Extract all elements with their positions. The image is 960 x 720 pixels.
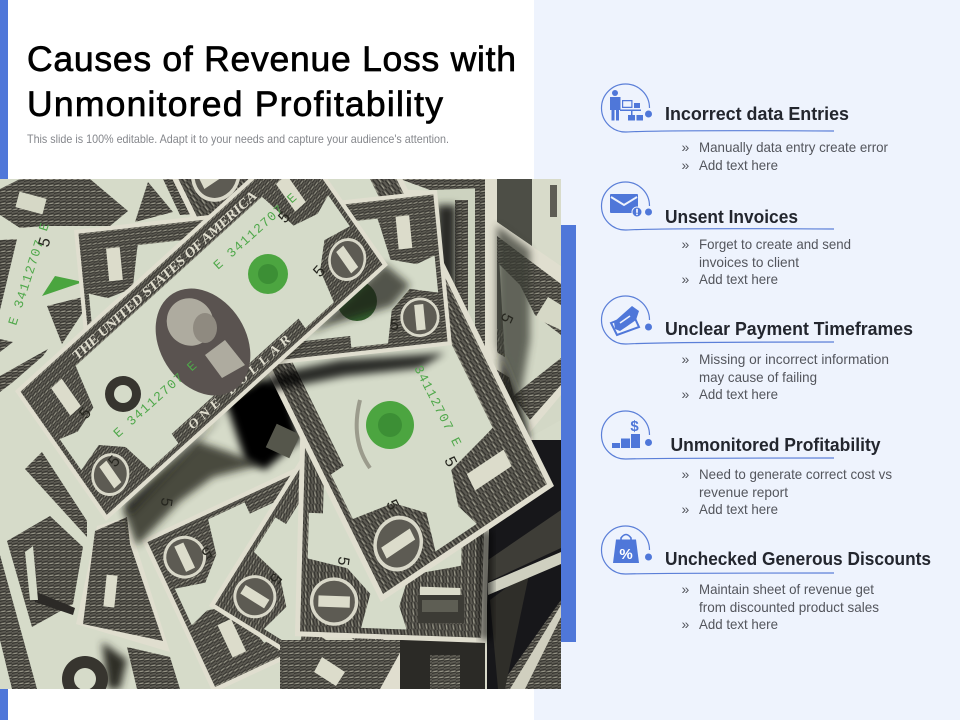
frame line	[602, 182, 834, 230]
bullets: Forget to create and send	[699, 236, 851, 252]
title: Unmonitored Profitability	[27, 84, 443, 124]
icon: bars with dollar sign: $	[630, 418, 639, 435]
item: Incorrect data Entries	[602, 84, 888, 173]
icon: bars with dollar sign	[612, 418, 640, 448]
right pale panel	[534, 0, 960, 720]
serial numbers and denominations: 5	[382, 497, 402, 513]
bullets: Add text here	[699, 157, 778, 173]
serial numbers and denominations: 5	[105, 453, 124, 471]
serial numbers and denominations: 5	[334, 555, 352, 567]
bullets	[682, 351, 889, 402]
icon: envelope with alert	[610, 194, 642, 217]
connector dot	[645, 554, 652, 560]
heading: Unmonitored Profitability	[670, 435, 880, 455]
bullets: »	[682, 351, 690, 367]
bullets: »	[682, 236, 690, 252]
connector dot	[645, 208, 652, 216]
serial numbers and denominations: 5	[310, 263, 329, 281]
bullets: Add text here	[699, 271, 778, 287]
icon: shopping bag with percent	[613, 534, 639, 563]
item: Unclear Payment Timeframes	[602, 296, 913, 402]
serial numbers and denominations: E 34112707 E	[211, 190, 301, 273]
heading: Unsent Invoices	[665, 207, 798, 227]
bullets: »	[682, 271, 690, 287]
serial numbers and denominations: E 34112707 E	[111, 358, 201, 441]
serial numbers and denominations: 5	[266, 570, 285, 587]
serial numbers and denominations: 5	[390, 317, 399, 334]
bullets: Maintain sheet of revenue get	[699, 581, 874, 597]
frame line	[602, 526, 834, 574]
bullets: Manually data entry create error	[699, 139, 888, 155]
serial numbers and denominations: 5	[76, 405, 95, 423]
bullets: Add text here	[699, 501, 778, 517]
bullets	[682, 466, 892, 517]
left accent bar	[0, 0, 8, 720]
bullets: »	[682, 386, 690, 402]
bullets	[682, 139, 888, 173]
green seal	[357, 400, 414, 468]
title: Causes of Revenue Loss with	[27, 39, 516, 79]
bullets: Add text here	[699, 386, 778, 402]
connector dot	[645, 439, 652, 446]
right accent bar	[561, 225, 576, 642]
heading: Unclear Payment Timeframes	[665, 319, 913, 339]
main bill with portrait: ONE DOLLAR	[185, 331, 293, 433]
serial numbers and denominations: 5	[157, 496, 175, 508]
bullets: »	[682, 466, 690, 482]
serial numbers and denominations: 5	[36, 235, 55, 249]
bullets: »	[682, 581, 690, 597]
serial numbers and denominations: 34112707 E	[410, 363, 465, 450]
photo: pile of dollar bills	[0, 179, 561, 689]
connector dot	[645, 110, 652, 118]
frame line	[602, 296, 834, 344]
connector dot	[645, 324, 652, 330]
item: Unmonitored Profitability	[602, 411, 892, 517]
serial numbers and denominations: 5	[497, 310, 516, 326]
item: Unchecked Generous Discounts	[602, 526, 931, 632]
bullets: revenue report	[699, 484, 788, 500]
subtitle: This slide is 100% editable. Adapt it to your needs and capture your audience's attention.	[27, 132, 449, 146]
bullets: invoices to client	[699, 254, 799, 270]
serial numbers and denominations: 5	[440, 454, 460, 470]
bullets	[682, 236, 851, 287]
frame line	[602, 411, 834, 459]
serial numbers and denominations	[6, 190, 516, 587]
main bill with portrait	[15, 135, 388, 521]
bullets: Add text here	[699, 616, 778, 632]
item: Unsent Invoices	[602, 182, 851, 287]
icon: hand with money	[611, 306, 639, 335]
bullets: from discounted product sales	[699, 599, 879, 615]
bullets: Need to generate correct cost vs	[699, 466, 892, 482]
serial numbers and denominations: 5	[198, 543, 214, 562]
bullets: may cause of failing	[699, 369, 817, 385]
bullets: »	[682, 501, 690, 517]
frame line	[602, 84, 834, 132]
serial numbers and denominations: 5	[275, 209, 294, 227]
main bill with portrait: THE UNITED STATES OF AMERICA	[70, 187, 260, 364]
bullets	[682, 581, 879, 632]
icon: person at computer	[610, 90, 643, 120]
title	[27, 39, 516, 124]
bullets: »	[682, 157, 690, 173]
icon: shopping bag with percent: %	[619, 546, 633, 563]
bullets: »	[682, 616, 690, 632]
heading: Unchecked Generous Discounts	[665, 549, 931, 569]
heading: Incorrect data Entries	[665, 104, 849, 124]
bullets: »	[682, 139, 690, 155]
serial numbers and denominations: E 34112707 E	[6, 220, 53, 327]
bullets: Missing or incorrect information	[699, 351, 889, 367]
